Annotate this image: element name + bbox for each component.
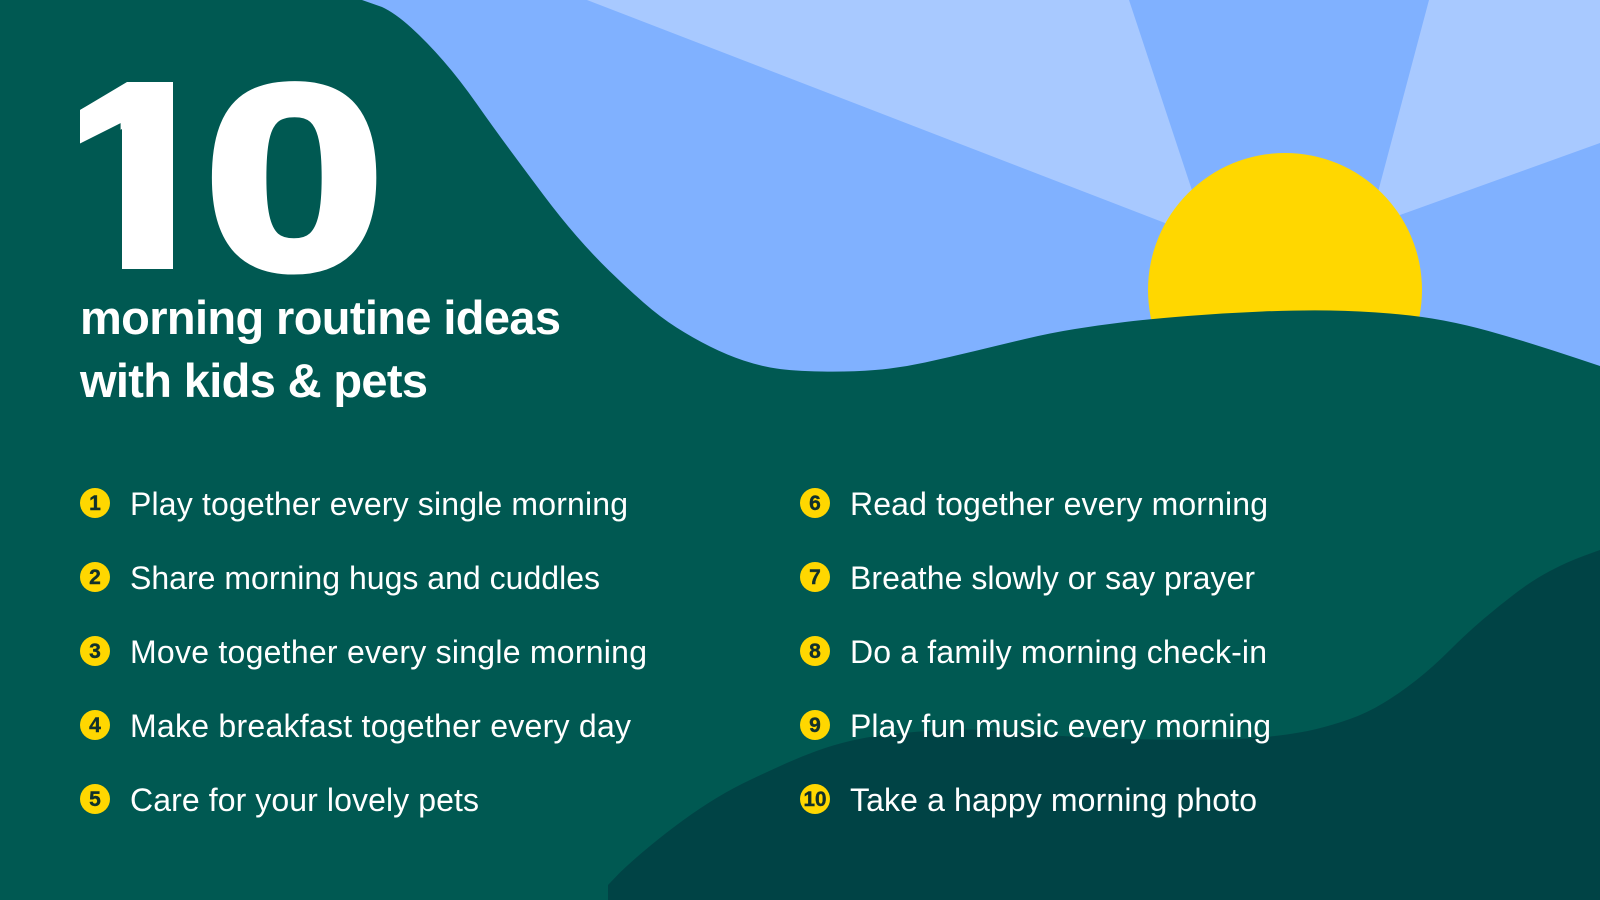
item 7: 7 — [809, 566, 821, 589]
sun rays — [587, 0, 1600, 290]
item 5: 5 — [89, 788, 101, 811]
item 9: 9 — [809, 714, 821, 737]
item 4: Make breakfast together every day — [130, 708, 631, 744]
item 8: 8 — [809, 640, 821, 663]
item 1: 1 — [89, 492, 101, 515]
item 10: Take a happy morning photo — [850, 782, 1257, 818]
item 9: Play fun music every morning — [850, 708, 1271, 744]
title text: morning routine ideas — [80, 291, 561, 344]
title number: 1 — [48, 27, 233, 326]
item 7: Breathe slowly or say prayer — [850, 560, 1255, 596]
item 1: Play together every single morning — [130, 486, 628, 522]
title text: with kids & pets — [79, 354, 428, 407]
item 3: Move together every single morning — [130, 634, 647, 670]
item 8: Do a family morning check-in — [850, 634, 1267, 670]
item 2: 2 — [89, 566, 101, 589]
item 2: Share morning hugs and cuddles — [130, 560, 600, 596]
title text — [79, 291, 561, 407]
list column 2 — [800, 486, 1271, 818]
item 6: 6 — [809, 492, 821, 515]
item 10: 10 — [804, 788, 826, 811]
icon: sun — [1148, 153, 1422, 427]
item 4: 4 — [89, 714, 101, 737]
title number — [80, 81, 376, 274]
list column 1 — [80, 486, 647, 818]
item 5: Care for your lovely pets — [130, 782, 479, 818]
item 3: 3 — [89, 640, 101, 663]
dark foreground hill — [608, 550, 1600, 900]
title number: 0 — [204, 31, 385, 324]
item 6: Read together every morning — [850, 486, 1268, 522]
